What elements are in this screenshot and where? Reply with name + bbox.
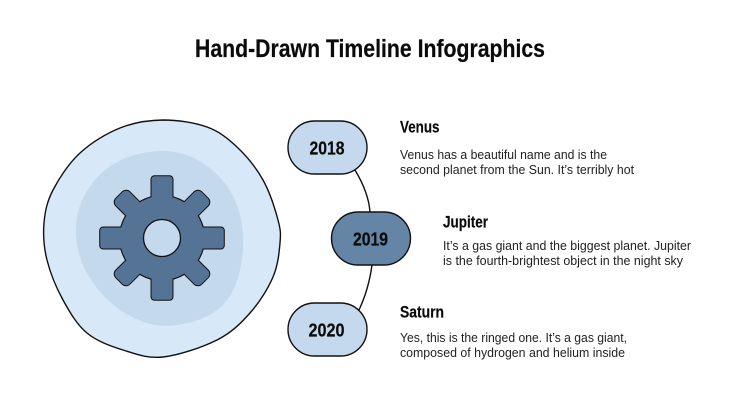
text block: Venus: second planet from the Sun. It’s terribly hot xyxy=(400,163,635,177)
text block: Saturn: Yes, this is the ringed one. It’s a gas giant, xyxy=(400,331,627,345)
2020 pill xyxy=(288,303,367,356)
text block: Jupiter: is the fourth-brightest object in the night sky xyxy=(443,254,684,268)
inner blob xyxy=(76,151,243,326)
2019 pill: 2019 xyxy=(353,228,388,250)
text block: Saturn xyxy=(400,302,627,360)
outer circle xyxy=(44,120,280,357)
text block: Jupiter: It’s a gas giant and the biggest planet. Jupiter xyxy=(443,239,691,253)
text block: Saturn: composed of hydrogen and helium inside xyxy=(400,346,625,360)
2018 pill xyxy=(288,121,367,174)
2019 pill xyxy=(332,212,410,265)
gear icon xyxy=(99,175,225,301)
illustration: gear in hand-drawn circle xyxy=(44,120,280,357)
text block: Jupiter: Jupiter xyxy=(443,212,488,232)
2020 pill: 2020 xyxy=(308,320,344,340)
text block: Venus xyxy=(400,118,635,177)
text block: Venus: Venus has a beautiful name and is the xyxy=(400,148,607,162)
text block: Saturn: Saturn xyxy=(400,302,444,322)
2018 pill: 2018 xyxy=(310,138,344,158)
text block: Jupiter xyxy=(443,212,691,268)
title: Hand-Drawn Timeline Infographics xyxy=(195,35,545,63)
timeline connector xyxy=(355,170,372,310)
text block: Venus: Venus xyxy=(400,118,440,136)
